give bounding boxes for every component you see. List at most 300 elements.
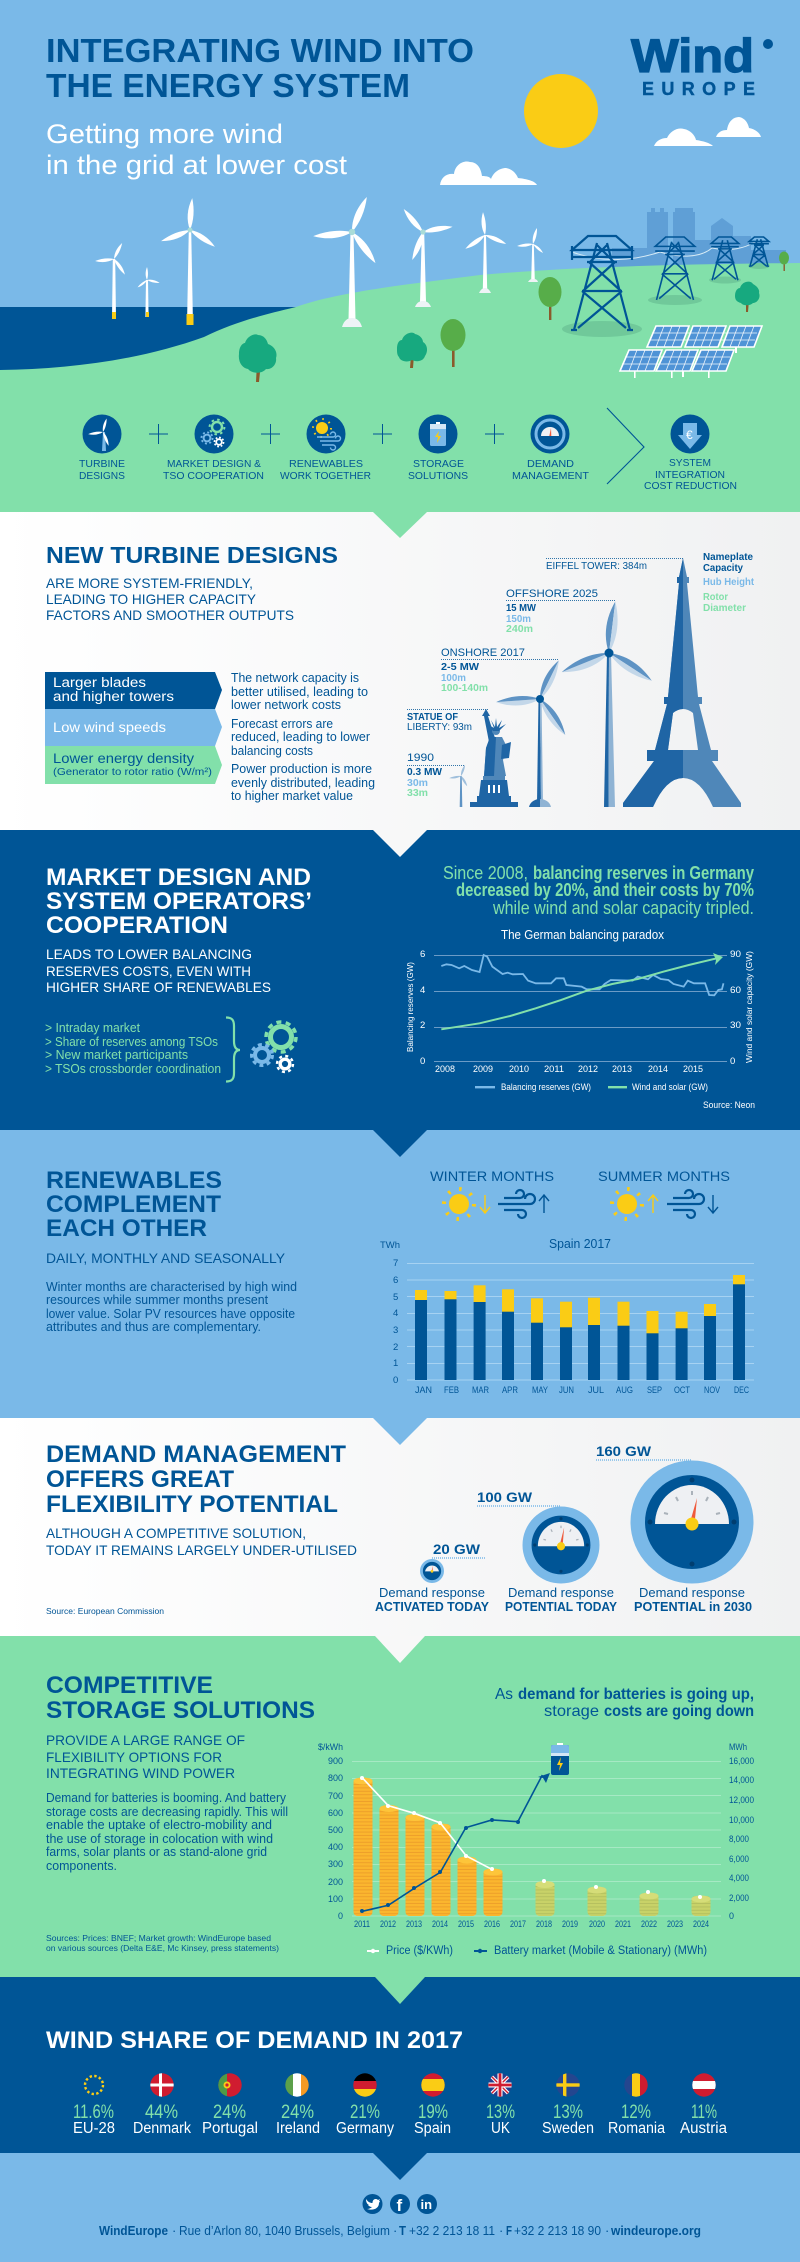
flag: UK [488, 2073, 512, 2097]
panel: storage solutions [0, 1636, 800, 1977]
chart: batteries: 2012 [380, 1919, 396, 1930]
percentages: 11.6% [73, 2102, 114, 2123]
subheading: TODAY IT REMAINS LARGELY UNDER-UTILISED [46, 1542, 357, 1558]
heading: STORAGE SOLUTIONS [46, 1697, 315, 1724]
turbines [95, 195, 544, 327]
gauge: 100 GW [477, 1490, 599, 1583]
icon: storage battery [418, 414, 458, 454]
icon: battery [551, 1743, 569, 1775]
chart: batteries: 2021 [615, 1919, 631, 1930]
chart: batteries: 2014 [432, 1919, 448, 1930]
comparison labels: 15 MW [506, 603, 537, 614]
arrow tags: Low wind speeds [53, 720, 166, 735]
winter and summer icons: SUMMER MONTHS [598, 1169, 730, 1184]
percentages: 19% [418, 2102, 448, 2123]
line chart: German balancing paradox: 30 [730, 1020, 741, 1031]
effects text: lower network costs [231, 698, 341, 712]
percentages: 13% [486, 2102, 515, 2123]
heading: COOPERATION [46, 912, 228, 939]
bar chart: Spain 2017: 7 [393, 1258, 398, 1269]
comparison labels: Capacity [703, 563, 743, 574]
step labels: MANAGEMENT [512, 470, 590, 482]
comparison labels: ONSHORE 2017 [441, 647, 525, 659]
source: Source: Neon [703, 1100, 755, 1110]
heading: SYSTEM OPERATORS’ [46, 888, 312, 915]
callout: Since 2008, [443, 863, 528, 883]
footer text: WindEurope [99, 2223, 168, 2238]
line chart: German balancing paradox: 2010 [509, 1064, 529, 1075]
country names: Denmark [133, 2120, 191, 2137]
step labels: DESIGNS [79, 470, 125, 482]
effects text: better utilised, leading to [231, 685, 368, 699]
chart: batteries: 200 [328, 1877, 343, 1888]
icon: sun [524, 74, 598, 148]
bar chart: Spain 2017: APR [502, 1385, 518, 1396]
subheading: INTEGRATING WIND POWER [46, 1765, 235, 1781]
effects text: reduced, leading to lower [231, 730, 370, 744]
sources: on various sources (Delta E&E, Mc Kinsey, press statements) [46, 1943, 279, 1953]
chart: batteries: 2,000 [729, 1893, 749, 1904]
chart: batteries: 500 [328, 1825, 343, 1836]
winter and summer icons: WINTER MONTHS [430, 1169, 554, 1184]
bar chart: Spain 2017: JAN [415, 1385, 432, 1396]
chart: batteries: 2017 [510, 1919, 526, 1930]
chart: batteries: 900 [328, 1756, 343, 1767]
chart: batteries: 2011 [354, 1919, 370, 1930]
comparison labels: Hub Height [703, 577, 755, 588]
chart: batteries: 400 [328, 1842, 343, 1853]
step labels: COST REDUCTION [644, 480, 737, 492]
step labels: SYSTEM [669, 457, 711, 469]
comparison labels: 1990 [407, 752, 434, 764]
chart: batteries: 10,000 [729, 1815, 754, 1826]
line chart: German balancing paradox: 2012 [578, 1064, 598, 1075]
callout: storage [544, 1703, 599, 1720]
subtitle: Getting more wind [46, 119, 283, 149]
line chart: German balancing paradox: Balancing reserves (GW) [405, 962, 415, 1052]
icon: renewables [306, 414, 346, 454]
effects text: Forecast errors are [231, 717, 333, 731]
body text [46, 1791, 288, 1873]
bar chart: Spain 2017: FEB [444, 1385, 459, 1396]
bullet list: > Intraday market [45, 1021, 141, 1035]
gauge captions: Demand response [379, 1585, 485, 1600]
chart: batteries: 800 [328, 1773, 343, 1784]
bar chart: Spain 2017: 6 [393, 1275, 398, 1286]
subheading: LEADS TO LOWER BALANCING [46, 946, 252, 962]
chart: batteries: 2020 [589, 1919, 605, 1930]
logo: WindEurope: Wind [631, 29, 754, 82]
chart: batteries: 14,000 [729, 1775, 754, 1786]
bullet list: > Share of reserves among TSOs [45, 1035, 218, 1049]
pylons [562, 236, 770, 337]
icon: linkedin [417, 2194, 437, 2214]
gauge captions: POTENTIAL TODAY [505, 1599, 617, 1614]
icon: cost reduction arrow [670, 414, 710, 454]
gauge: 160 GW [596, 1444, 754, 1584]
icon: onshore 2017 turbine [496, 658, 569, 807]
battery market line [360, 1773, 550, 1913]
chart: batteries: 600 [328, 1808, 343, 1819]
step labels: INTEGRATION [655, 469, 725, 481]
callout: As [495, 1686, 513, 1703]
comparison labels: 100m [441, 673, 466, 684]
bar chart: Spain 2017: DEC [734, 1385, 749, 1396]
line chart: German balancing paradox: Wind and solar capacity (GW) [744, 951, 754, 1063]
comparison labels: Nameplate [703, 552, 753, 563]
body text: the use of storage in colocation with wind [46, 1832, 273, 1846]
panel: market design [0, 830, 800, 1130]
gauge captions: ACTIVATED TODAY [375, 1599, 489, 1614]
bar chart: Spain 2017: NOV [704, 1385, 721, 1396]
effects text: balancing costs [231, 744, 313, 758]
panel: wind share of demand [0, 1977, 800, 2153]
chart legend: Battery market (Mobile & Stationary) (MWh) [494, 1945, 707, 1957]
flag: Germany [353, 2073, 377, 2097]
icon: linkedin: in [420, 2197, 432, 2212]
subheading: ARE MORE SYSTEM-FRIENDLY, [46, 575, 253, 591]
line chart: German balancing paradox: 2011 [544, 1064, 564, 1075]
line chart: German balancing paradox: 4 [420, 985, 425, 996]
icon: gears [252, 1022, 296, 1072]
flag: Denmark [150, 2073, 174, 2097]
subheading [46, 1732, 245, 1781]
source: Source: European Commission [46, 1606, 164, 1616]
chart: batteries: MWh [729, 1742, 747, 1753]
chart legend: Balancing reserves (GW) [501, 1082, 591, 1093]
title: INTEGRATING WIND INTO [46, 32, 474, 69]
subheading: RESERVES COSTS, EVEN WITH [46, 963, 251, 979]
country names [73, 2120, 727, 2137]
percentages: 44% [145, 2102, 178, 2123]
callout: while wind and solar capacity tripled. [492, 898, 754, 918]
footer text: · [499, 2223, 503, 2238]
sources: Sources: Prices: BNEF; Market growth: WindEurope based [46, 1933, 271, 1943]
footer text [99, 2223, 701, 2238]
chart: batteries: 300 [328, 1859, 343, 1870]
country names: Romania [608, 2120, 665, 2137]
body text: attributes and thus are complementary. [46, 1320, 261, 1334]
callout: costs are going down [604, 1703, 754, 1720]
chart: batteries: 8,000 [729, 1834, 749, 1845]
body text: enable the uptake of electro-mobility and [46, 1818, 272, 1832]
comparison labels: Diameter [703, 603, 746, 614]
gauge captions: Demand response [508, 1585, 614, 1600]
logo: WindEurope [631, 29, 773, 99]
country names: Austria [680, 2120, 727, 2137]
subheading: HIGHER SHARE OF RENEWABLES [46, 979, 271, 995]
callout [443, 863, 754, 918]
comparison labels: EIFFEL TOWER: 384m [546, 561, 647, 572]
effects text: Power production is more [231, 762, 372, 776]
footer text: +32 2 213 18 90 [514, 2223, 601, 2238]
subheading [46, 1525, 357, 1558]
comparison labels: 0.3 MW [407, 767, 443, 778]
icon: demand gauge [530, 414, 570, 454]
winter and summer icons [430, 1169, 730, 1219]
heading [46, 1672, 315, 1724]
step labels: TURBINE [79, 458, 125, 470]
gauge: 20 GW: 20 GW [433, 1542, 480, 1557]
gauge: 20 GW [420, 1542, 485, 1583]
chart: batteries [318, 1742, 754, 1930]
chart: batteries: 2016 [484, 1919, 500, 1930]
subtitle: in the grid at lower cost [46, 150, 348, 180]
gauge: 100 GW: 100 GW [477, 1490, 532, 1505]
sources [46, 1933, 279, 1953]
bar chart: Spain 2017: 1 [393, 1358, 398, 1369]
bar chart: Spain 2017: OCT [674, 1385, 690, 1396]
icon: statue of liberty [470, 709, 518, 807]
country names: Sweden [542, 2120, 594, 2137]
comparison labels: 240m [506, 624, 533, 635]
chart legend: Price ($/KWh) [386, 1945, 453, 1957]
chart: batteries: 0 [338, 1911, 343, 1922]
solar panels [620, 326, 762, 378]
line chart: German balancing paradox: 2014 [648, 1064, 668, 1075]
heading: NEW TURBINE DESIGNS [46, 542, 338, 568]
panel: demand management [0, 1418, 800, 1636]
arrow tags: Lower energy density [53, 751, 194, 766]
chart: batteries: $/kWh [318, 1742, 343, 1753]
percentages: 11% [691, 2102, 717, 2123]
bar chart: Spain 2017: MAR [472, 1385, 489, 1396]
comparison labels: OFFSHORE 2025 [506, 588, 598, 600]
bullet list [45, 1021, 221, 1076]
bar chart: Spain 2017: JUN [559, 1385, 574, 1396]
factory skyline [612, 208, 786, 268]
bar chart: Spain 2017: TWh [380, 1240, 400, 1250]
chart: batteries: 16,000 [729, 1756, 754, 1767]
percentages: 12% [621, 2102, 651, 2123]
line chart: German balancing paradox: 6 [420, 949, 425, 960]
icon: facebook: f [396, 2196, 402, 2215]
bar chart: Spain 2017: 3 [393, 1325, 398, 1336]
comparison labels [407, 552, 755, 799]
country names: Portugal [202, 2120, 258, 2137]
subheading: ALTHOUGH A COMPETITIVE SOLUTION, [46, 1525, 306, 1541]
panel: hero [0, 0, 800, 512]
clouds [440, 117, 761, 185]
panel: footer [0, 2153, 800, 2262]
panel: new turbine designs [0, 512, 800, 830]
body text [46, 1280, 297, 1334]
body text: resources while summer months present [46, 1293, 269, 1307]
effects text: evenly distributed, leading [231, 776, 375, 790]
body text: components. [46, 1859, 117, 1873]
chart: batteries: 12,000 [729, 1795, 754, 1806]
bar chart: Spain 2017: 5 [393, 1292, 398, 1303]
trees [239, 252, 789, 382]
arrow tags [45, 672, 222, 784]
gauge captions: POTENTIAL in 2030 [634, 1599, 752, 1614]
comparison labels: 100-140m [441, 683, 488, 694]
line chart: German balancing paradox: 2015 [683, 1064, 703, 1075]
arrow tags: and higher towers [53, 689, 174, 704]
flag: Ireland [285, 2073, 309, 2097]
country names: Germany [336, 2120, 394, 2137]
chart: batteries: 2015 [458, 1919, 474, 1930]
effects text: The network capacity is [231, 671, 359, 685]
callout: demand for batteries is going up, [518, 1686, 754, 1703]
body text: Demand for batteries is booming. And battery [46, 1791, 287, 1805]
heading: OFFERS GREAT [46, 1466, 234, 1493]
flag: Romania [624, 2073, 648, 2097]
heading: RENEWABLES [46, 1167, 222, 1194]
heading [46, 1167, 222, 1242]
chart: batteries: 0 [729, 1911, 734, 1922]
plus signs [149, 424, 504, 444]
heading [46, 864, 312, 939]
footer text: · [172, 2223, 176, 2238]
line chart: German balancing paradox [405, 928, 754, 1075]
chart legend [475, 1082, 708, 1093]
gauge: 160 GW: 160 GW [596, 1444, 651, 1459]
step labels: WORK TOGETHER [280, 470, 371, 482]
footer text: F [506, 2223, 512, 2238]
percentages: 13% [553, 2102, 583, 2123]
gauge captions: Demand response [639, 1585, 745, 1600]
sea [0, 307, 320, 372]
step labels: RENEWABLES [289, 458, 363, 470]
step labels [79, 457, 737, 492]
icon: facebook [390, 2194, 410, 2215]
bar chart: Spain 2017: JUL [588, 1385, 604, 1396]
bar chart: Spain 2017: 4 [393, 1308, 398, 1319]
price line [360, 1776, 702, 1899]
comparison labels: 30m [407, 778, 428, 789]
subtitle [46, 119, 348, 180]
flag: Sweden [556, 2073, 580, 2097]
logo: WindEurope: EUROPE [642, 79, 755, 99]
icon: 1990 turbine [449, 764, 468, 807]
chart: batteries: 4,000 [729, 1873, 749, 1884]
chart: batteries: 2013 [406, 1919, 422, 1930]
line chart: German balancing paradox: 60 [730, 985, 741, 996]
coin stacks [354, 1778, 710, 1916]
step labels: TSO COOPERATION [163, 470, 264, 482]
callout: balancing reserves in Germany [533, 863, 754, 883]
icon: twitter [362, 2194, 382, 2214]
bar chart: Spain 2017: 0 [393, 1375, 398, 1386]
chart: batteries: 2023 [667, 1919, 683, 1930]
body text: lower value. Solar PV resources have opposite [46, 1307, 295, 1321]
icon: gears [194, 414, 234, 454]
effects text [231, 671, 375, 803]
flag: Austria [692, 2073, 716, 2097]
footer text: · [393, 2223, 397, 2238]
chart: batteries: 2019 [562, 1919, 578, 1930]
chart legend: Wind and solar (GW) [632, 1082, 708, 1093]
country names: Ireland [276, 2120, 320, 2137]
footer text: · [605, 2223, 609, 2238]
subheading [46, 946, 271, 995]
bar chart: Spain 2017: Spain 2017 [549, 1236, 611, 1251]
arrow tags: Larger blades [53, 675, 146, 690]
icon: turbine designs [82, 414, 122, 454]
heading: FLEXIBILITY POTENTIAL [46, 1491, 338, 1518]
brace [226, 1018, 240, 1082]
flag: Spain [421, 2073, 445, 2097]
flag: EU-28 [85, 2076, 103, 2094]
line chart: German balancing paradox: The German balancing paradox [501, 928, 665, 942]
line chart: German balancing paradox: 2 [420, 1020, 425, 1031]
chart: batteries: 6,000 [729, 1854, 749, 1865]
comparison labels: Rotor [703, 592, 728, 603]
chart: batteries: 2022 [641, 1919, 657, 1930]
chart: batteries: 700 [328, 1791, 343, 1802]
subheading: LEADING TO HIGHER CAPACITY [46, 591, 257, 607]
country names: Spain [414, 2120, 451, 2137]
percentages: 21% [350, 2102, 380, 2123]
callout [495, 1686, 754, 1720]
comparison labels: 2-5 MW [441, 662, 480, 673]
comparison labels: LIBERTY: 93m [407, 722, 472, 733]
step labels: MARKET DESIGN & [167, 458, 261, 470]
flag: Portugal [218, 2073, 242, 2097]
heading: MARKET DESIGN AND [46, 864, 311, 891]
arrow: chevron [607, 408, 644, 484]
hill [0, 263, 800, 512]
step labels: STORAGE [413, 458, 464, 470]
chart legend [367, 1945, 707, 1957]
heading: WIND SHARE OF DEMAND IN 2017 [46, 2027, 463, 2054]
step labels: SOLUTIONS [408, 470, 468, 482]
percentages: 24% [213, 2102, 246, 2123]
footer text: windeurope.org [610, 2223, 701, 2238]
percentages [73, 2102, 717, 2123]
country names: EU-28 [73, 2120, 115, 2137]
arrow tags: (Generator to rotor ratio (W/m²) [53, 766, 212, 778]
panel: renewables complement [0, 1130, 800, 1418]
bar chart: Spain 2017: MAY [532, 1385, 549, 1396]
icon: offshore 2025 turbine [560, 601, 655, 807]
bullet list: > TSOs crossborder coordination [45, 1062, 221, 1076]
chart: batteries: 100 [328, 1894, 343, 1905]
bar chart: Spain 2017: 2 [393, 1342, 398, 1353]
bullet list: > New market participants [45, 1048, 188, 1062]
subheading: FLEXIBILITY OPTIONS FOR [46, 1749, 222, 1765]
chart: batteries: 2018 [536, 1919, 552, 1930]
line chart: German balancing paradox: 2013 [612, 1064, 632, 1075]
subheading: FACTORS AND SMOOTHER OUTPUTS [46, 607, 294, 623]
line chart: German balancing paradox: 2009 [473, 1064, 493, 1075]
title [46, 32, 474, 104]
country names: UK [491, 2120, 511, 2137]
effects text: to higher market value [231, 789, 353, 803]
heading: EACH OTHER [46, 1215, 207, 1242]
line chart: German balancing paradox: 90 [730, 949, 741, 960]
comparison labels: 33m [407, 788, 428, 799]
heading: DEMAND MANAGEMENT [46, 1441, 346, 1468]
icon: cost reduction arrow: € [686, 428, 693, 442]
footer text: Rue d’Arlon 80, 1040 Brussels, Belgium [179, 2223, 390, 2238]
heading: COMPLEMENT [46, 1191, 221, 1218]
step labels: DEMAND [527, 458, 574, 470]
subheading [46, 575, 294, 623]
icon: eiffel tower [623, 558, 741, 807]
comparison labels: STATUE OF [407, 712, 458, 723]
line chart: German balancing paradox: 0 [730, 1056, 735, 1067]
body text: storage costs are decreasing rapidly. This will [46, 1805, 288, 1819]
body text: farms, solar plants or as stand-alone grid [46, 1845, 267, 1859]
gauge captions [375, 1585, 752, 1614]
body text: Winter months are characterised by high wind [46, 1280, 297, 1294]
chart: batteries: 2024 [693, 1919, 709, 1930]
bar chart: Spain 2017: SEP [647, 1385, 662, 1396]
line chart: German balancing paradox: 0 [420, 1056, 425, 1067]
bar chart: Spain 2017 [380, 1236, 754, 1396]
